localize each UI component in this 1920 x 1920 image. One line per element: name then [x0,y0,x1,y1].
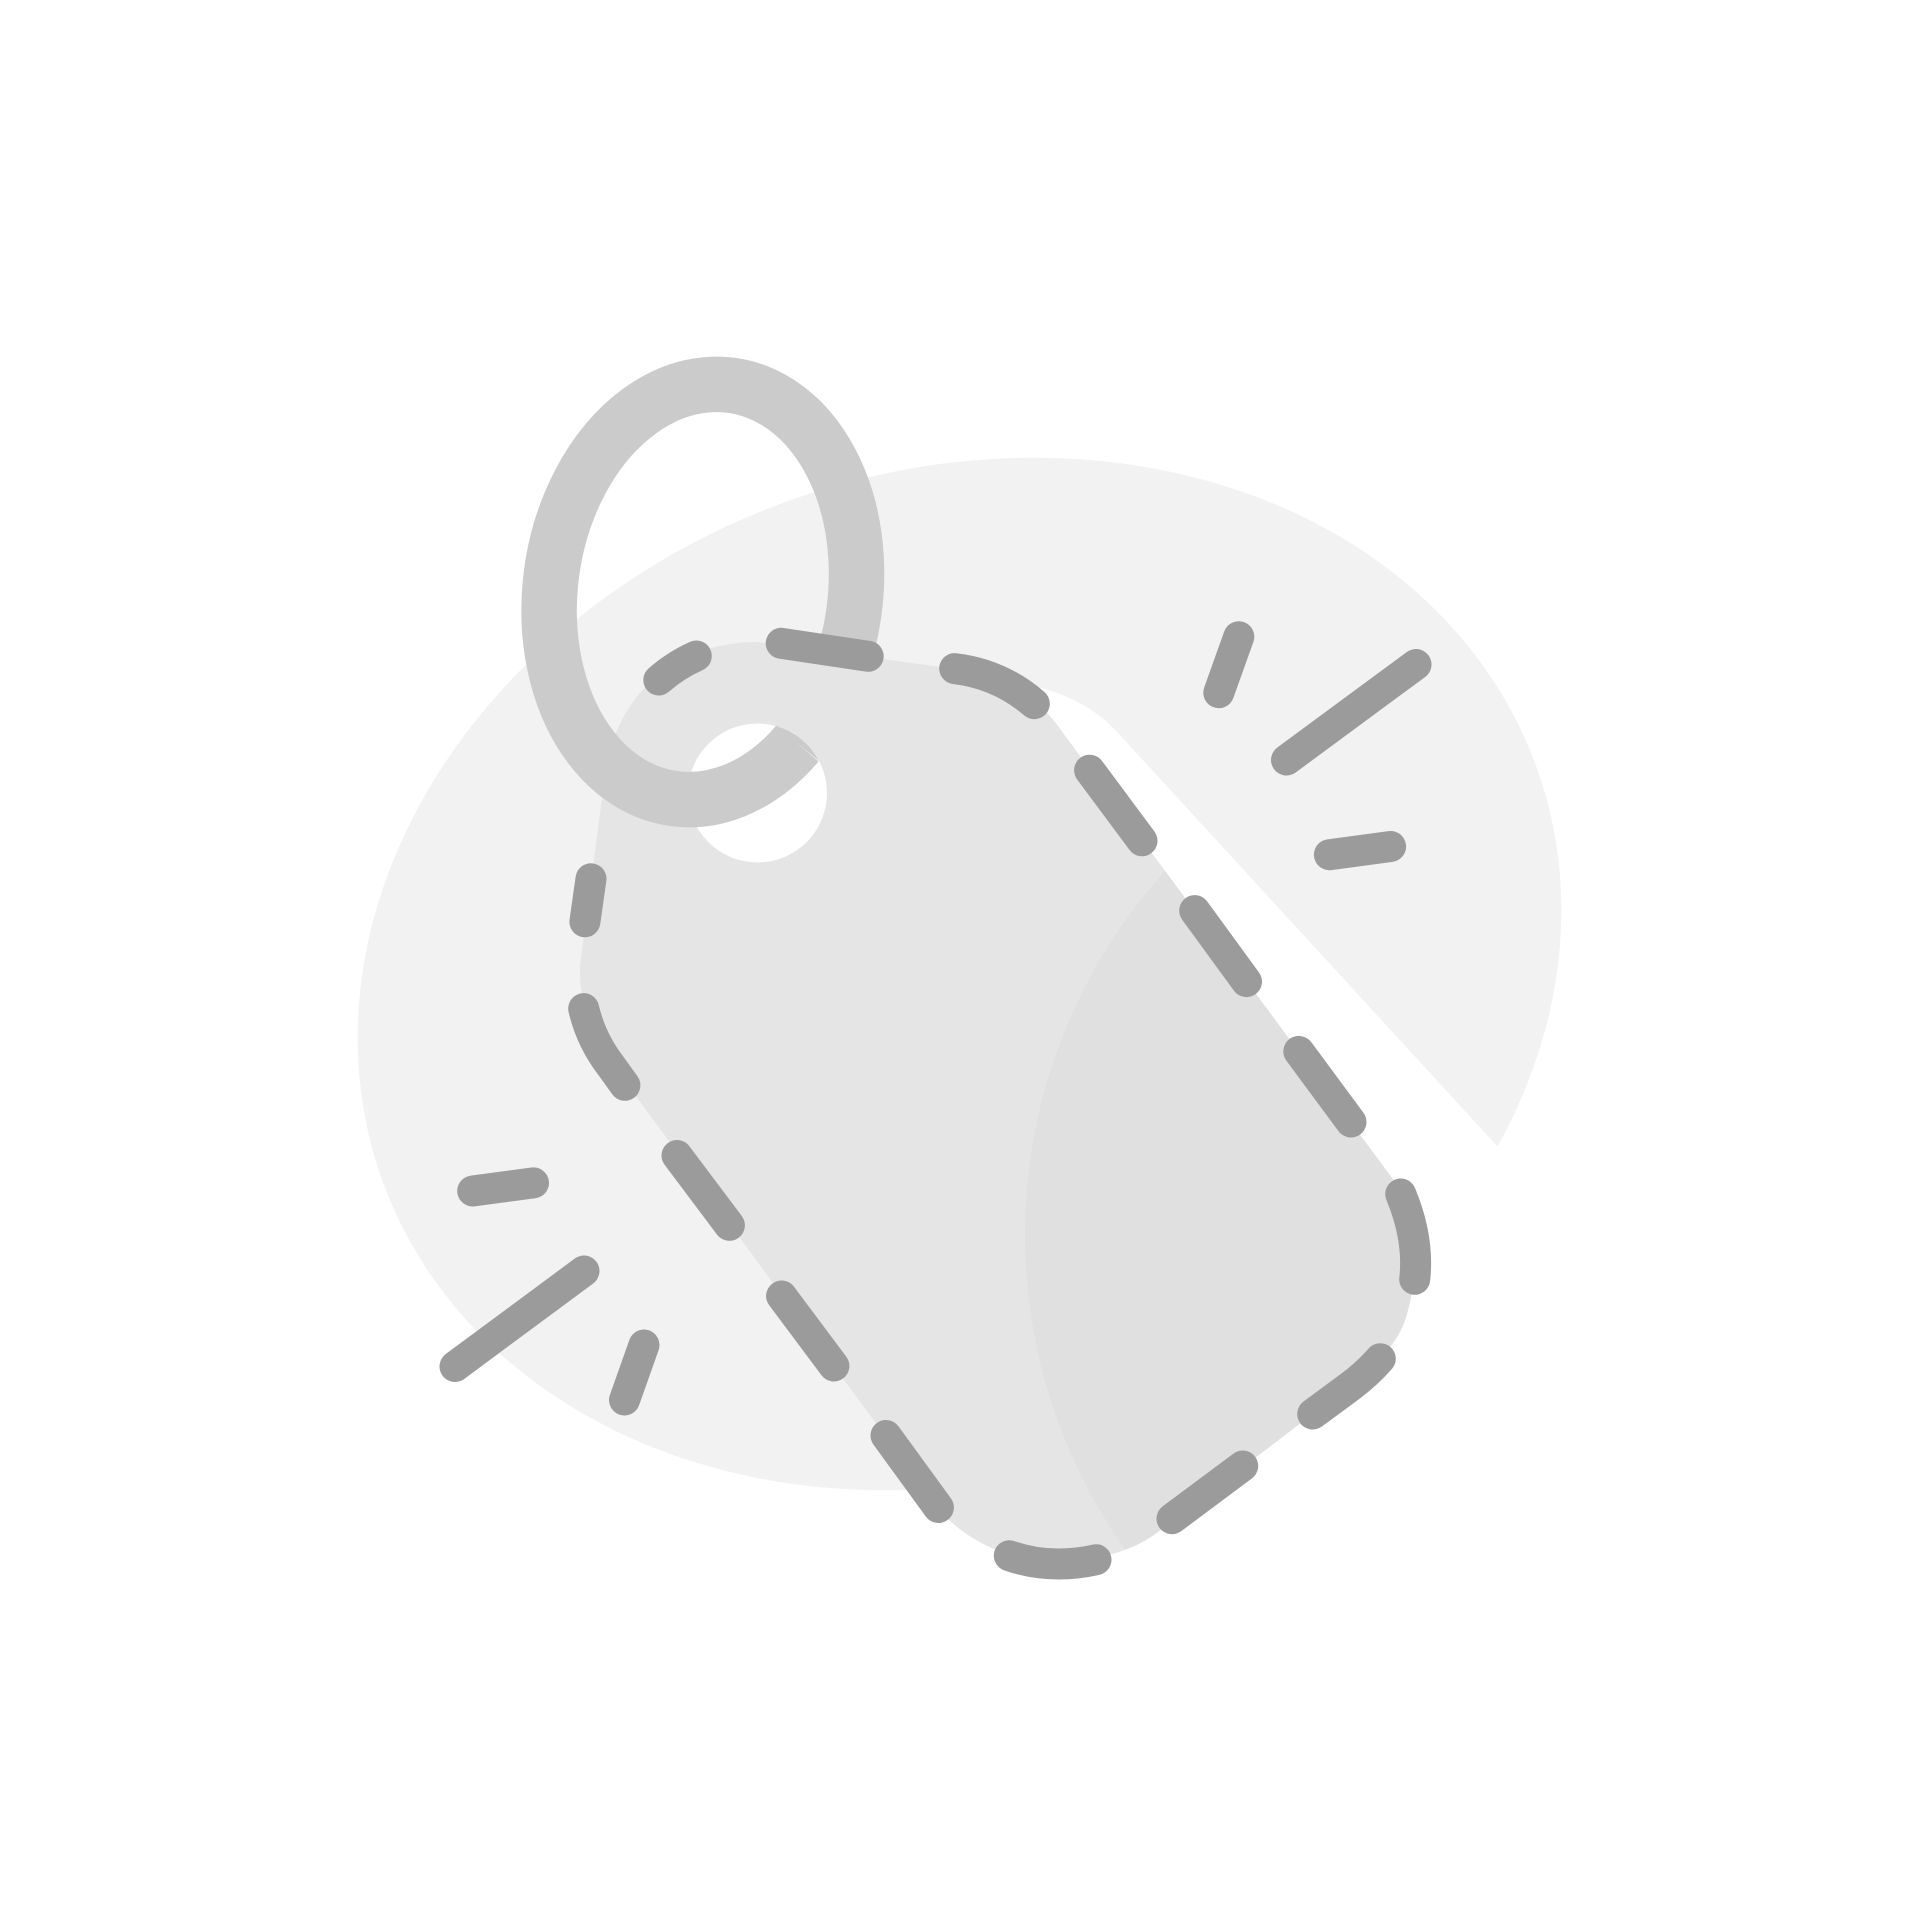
sparkle lines bottom left [455,1183,644,1400]
sparkle lines top right [1219,637,1416,855]
loop end inside hole [776,726,819,761]
loop stroke [549,384,857,800]
background blob [214,296,1705,1652]
blob ellipse [214,296,1705,1652]
price tag body [580,642,1412,1554]
dashed stitching outline [584,643,1416,1564]
string loop [549,384,857,800]
blob cut-out [950,688,1650,1650]
tag base shape [580,642,1414,1560]
tag hole [688,724,827,862]
illustration: price tag [358,356,1562,1580]
tag shaded area [1126,871,1411,1550]
